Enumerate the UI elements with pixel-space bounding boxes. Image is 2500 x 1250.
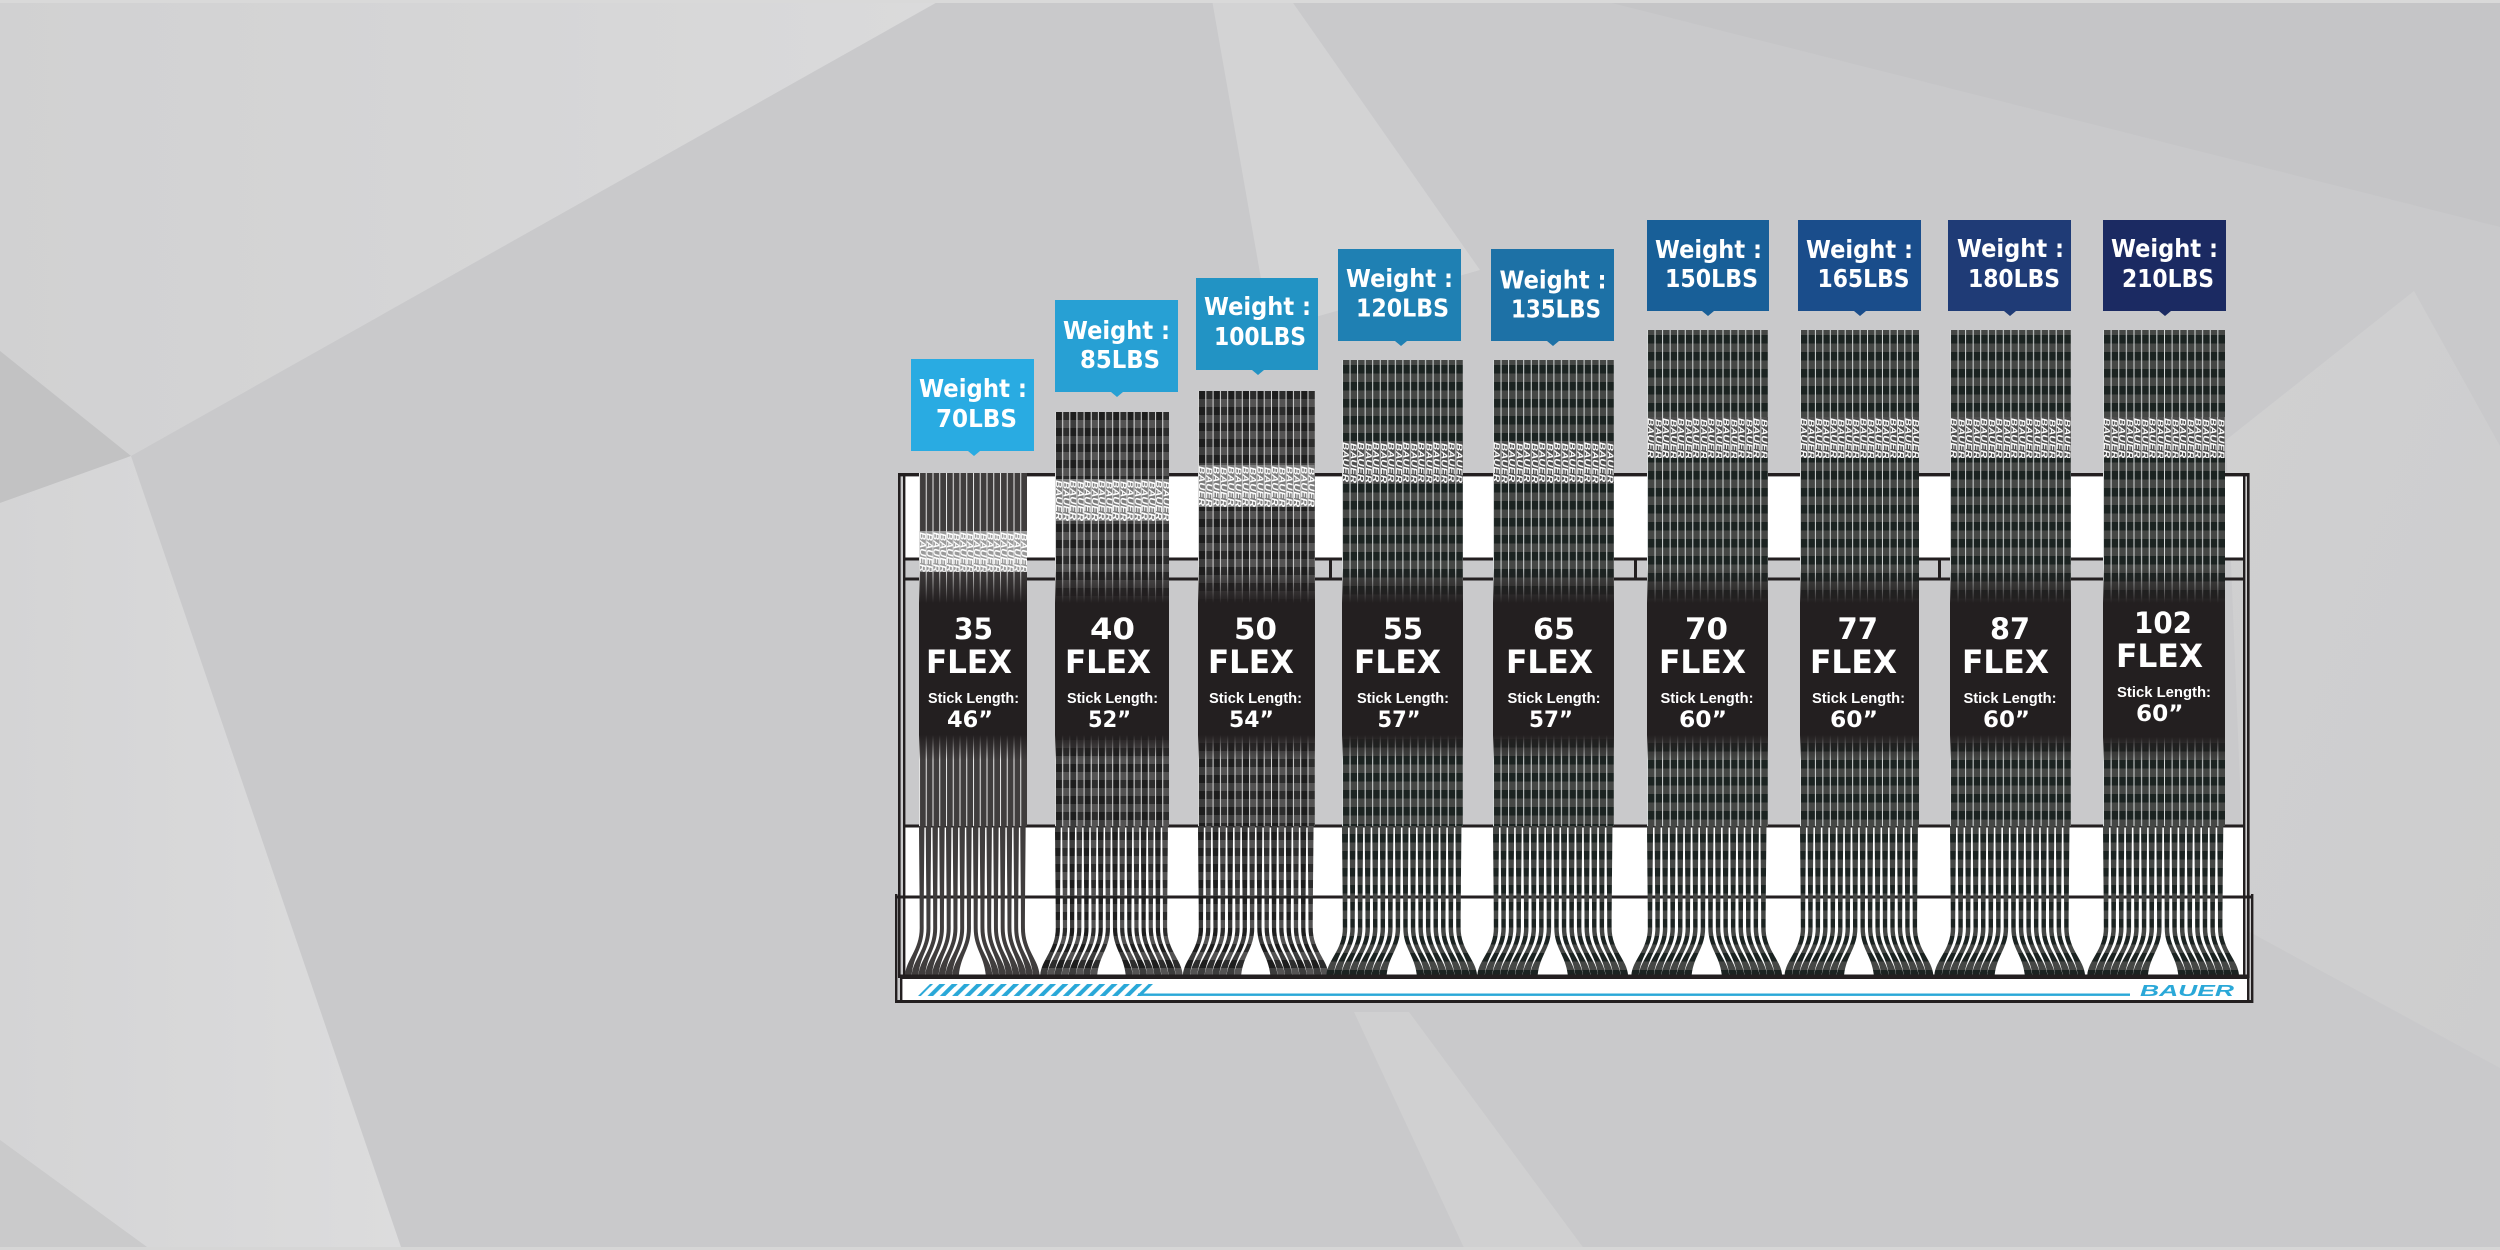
weight tag: [1948, 220, 2071, 316]
weight tag: 135LBS: [1511, 294, 1601, 324]
column: 65 flex: [1477, 249, 1628, 975]
flex text: 57”: [1378, 708, 1420, 733]
column: 102 flex: [2087, 220, 2239, 975]
flex text: 87: [1990, 612, 2030, 646]
blue hatch stripe: [918, 984, 1153, 996]
flex text: [1962, 612, 2056, 733]
flex text: [926, 612, 1019, 733]
weight tag: Weight :: [919, 374, 1027, 403]
flex text: 60”: [2136, 702, 2184, 727]
column: 40 flex: [1040, 300, 1183, 975]
weight tag: Weight :: [1204, 292, 1311, 321]
flex text: 65: [1533, 612, 1575, 646]
sticks: [1785, 330, 1933, 975]
flex text: Stick Length:: [928, 690, 1019, 707]
flex text: FLEX: [2116, 637, 2203, 675]
weight tag: [911, 359, 1034, 456]
flex text: FLEX: [1065, 643, 1151, 681]
blue rule: [1138, 994, 2130, 996]
flex text: FLEX: [1208, 643, 1294, 681]
flex text: FLEX: [1354, 643, 1441, 681]
weight tag: Weight :: [1806, 235, 1913, 264]
weight tag: [2103, 220, 2226, 316]
base panel with Bauer branding: [895, 974, 2253, 1003]
column: 55 flex: [1326, 249, 1477, 975]
flex text: FLEX: [1962, 643, 2049, 681]
flex text: 57”: [1529, 708, 1573, 733]
weight tag: 100LBS: [1214, 322, 1306, 351]
weight tag: [1055, 300, 1178, 397]
sticks: [1934, 330, 2085, 975]
flex text: [1354, 612, 1449, 733]
flex text: 70: [1685, 612, 1728, 646]
sticks: [1477, 360, 1628, 975]
flex text: Stick Length:: [1357, 690, 1449, 707]
flex text: FLEX: [1810, 643, 1897, 681]
weight tag: [1647, 220, 1769, 316]
weight tag: Weight :: [1655, 235, 1762, 264]
weight tag: 180LBS: [1968, 264, 2060, 293]
weight tag: 85LBS: [1080, 345, 1160, 374]
flex text: 60”: [1679, 708, 1727, 733]
weight tag: [1338, 249, 1461, 346]
flex text: 40: [1090, 612, 1135, 646]
flex text: 54”: [1229, 708, 1274, 733]
flex text: 60”: [1830, 708, 1878, 733]
flex text: 60”: [1983, 708, 2030, 733]
flex text: Stick Length:: [1964, 690, 2056, 707]
flex text: 46”: [947, 708, 993, 733]
weight tag: Weight :: [1500, 266, 1606, 294]
weight tag: 210LBS: [2122, 264, 2214, 293]
rack: hockey stick rack frame: [895, 473, 2253, 1003]
sticks: [1040, 412, 1183, 975]
sticks: [1183, 391, 1329, 975]
flex text: [1208, 612, 1302, 733]
weight tag: [1798, 220, 1921, 316]
flex text: Stick Length:: [1067, 690, 1158, 707]
flex text: 52”: [1088, 708, 1131, 733]
weight tag: [1491, 249, 1614, 346]
weight tag: 120LBS: [1356, 294, 1449, 322]
flex text: Stick Length:: [1660, 690, 1754, 707]
sticks: [1326, 360, 1477, 975]
flex text: [2116, 606, 2211, 727]
flex text: 77: [1838, 612, 1878, 646]
column: 35 flex: [905, 359, 1040, 975]
flex text: 102: [2134, 606, 2192, 640]
flex text: 55: [1383, 612, 1423, 646]
weight tag: 150LBS: [1665, 264, 1758, 293]
weight tag: Weight :: [2111, 234, 2218, 263]
weight tag: 165LBS: [1818, 264, 1910, 293]
flex text: FLEX: [1506, 643, 1593, 681]
flex text: FLEX: [1659, 643, 1746, 681]
flex text: Stick Length:: [1209, 690, 1302, 707]
column: 50 flex: [1183, 278, 1329, 975]
Bauer logo: BAUER: [2140, 983, 2235, 1000]
weight tag: [1196, 278, 1318, 375]
flex text: [1810, 612, 1905, 733]
flex text: 50: [1234, 612, 1277, 646]
sticks: [1631, 330, 1782, 975]
flex text: Stick Length:: [1812, 690, 1905, 707]
flex text: Stick Length:: [2117, 684, 2211, 701]
flex text: [1659, 612, 1754, 733]
weight tag: Weight :: [1957, 234, 2064, 263]
weight tag: 70LBS: [936, 404, 1017, 433]
column: 77 flex: [1785, 220, 1933, 975]
flex text: FLEX: [926, 643, 1012, 681]
flex text: Stick Length:: [1508, 690, 1600, 707]
flex text: [1065, 612, 1158, 733]
column: 70 flex: [1631, 220, 1782, 975]
sticks: [905, 473, 1040, 975]
flex text: [1506, 612, 1600, 733]
weight tag: Weight :: [1346, 264, 1453, 293]
sticks: [2087, 330, 2239, 975]
column: 87 flex: [1934, 220, 2085, 975]
weight tag: Weight :: [1063, 316, 1170, 345]
flex text: 35: [954, 612, 993, 646]
